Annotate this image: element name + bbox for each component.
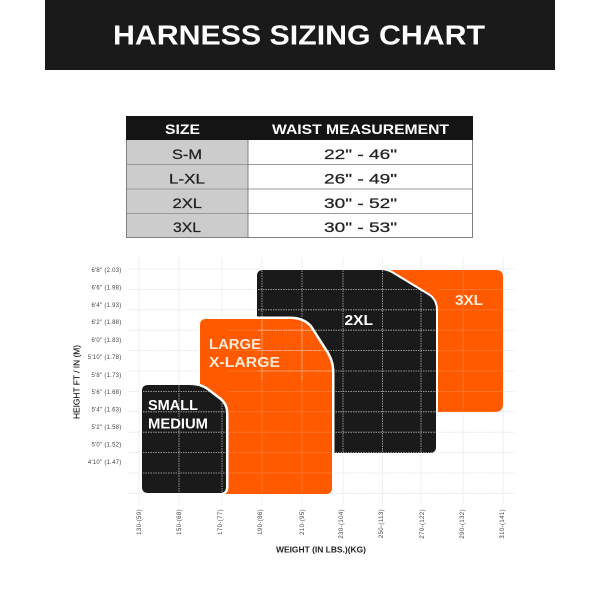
table rows: S-M	[172, 146, 202, 162]
height tick labels: 6'4" (1.93)	[91, 303, 122, 309]
zone labels: X-LARGE	[209, 354, 280, 371]
x axis title: WEIGHT (IN LBS.)(KG)	[276, 546, 366, 554]
table header: WAIST MEASUREMENT	[272, 121, 450, 137]
weight tick labels: 290-(132)	[460, 509, 466, 539]
table rows: 3XL	[173, 219, 201, 235]
height tick labels: 5'10" (1.78)	[88, 355, 122, 361]
sizing chart	[72, 258, 515, 554]
table rows: 30" - 52"	[324, 195, 397, 211]
weight tick labels: 150-(68)	[177, 509, 183, 535]
height tick labels: 5'4" (1.63)	[91, 408, 122, 414]
table rows: 2XL	[172, 195, 202, 211]
title banner	[45, 0, 555, 70]
Small / Medium zone	[142, 385, 226, 493]
weight tick labels: 190-(86)	[258, 509, 264, 535]
weight tick labels	[137, 509, 506, 539]
3XL zone	[380, 270, 503, 412]
size table	[126, 116, 473, 238]
table rows: L-XL	[169, 170, 205, 186]
zone labels: MEDIUM	[148, 416, 208, 432]
height tick labels: 6'0" (1.83)	[91, 338, 122, 344]
height tick labels: 6'2" (1.88)	[91, 320, 122, 326]
Large / X-Large zone	[200, 319, 332, 494]
weight tick labels: 130-(59)	[137, 509, 143, 535]
zone labels: LARGE	[209, 336, 261, 353]
weight tick labels: 230-(104)	[339, 509, 345, 539]
height tick labels: 5'8" (1.73)	[91, 373, 122, 379]
height tick labels: 5'6" (1.68)	[91, 390, 122, 396]
height tick labels: 5'0" (1.52)	[91, 442, 122, 448]
height tick labels: 6'6" (1.98)	[91, 286, 122, 292]
weight tick labels: 310-(141)	[500, 509, 506, 539]
table header	[165, 121, 450, 137]
zone labels: 2XL	[344, 312, 373, 329]
zone labels: 3XL	[455, 292, 483, 309]
zone labels: SMALL	[148, 397, 198, 414]
height tick labels: 6'8" (2.03)	[91, 268, 122, 274]
weight tick labels: 170-(77)	[218, 509, 224, 535]
height tick labels: 4'10" (1.47)	[88, 460, 122, 466]
table rows: 30" - 53"	[324, 219, 397, 235]
height tick labels: 5'2" (1.58)	[91, 425, 122, 431]
height tick labels	[88, 268, 122, 466]
zone labels	[148, 292, 483, 432]
y axis title: HEIGHT FT / IN (M)	[72, 345, 82, 419]
weight tick labels: 210-(95)	[300, 509, 306, 535]
2XL zone	[257, 270, 436, 453]
table rows	[169, 146, 397, 235]
table header: SIZE	[165, 121, 200, 137]
weight tick labels: 270-(122)	[420, 509, 426, 539]
table rows: 26" - 49"	[324, 170, 397, 186]
title: HARNESS SIZING CHART	[113, 20, 485, 50]
weight tick labels: 250-(113)	[379, 509, 385, 538]
table rows: 22" - 46"	[324, 146, 397, 162]
